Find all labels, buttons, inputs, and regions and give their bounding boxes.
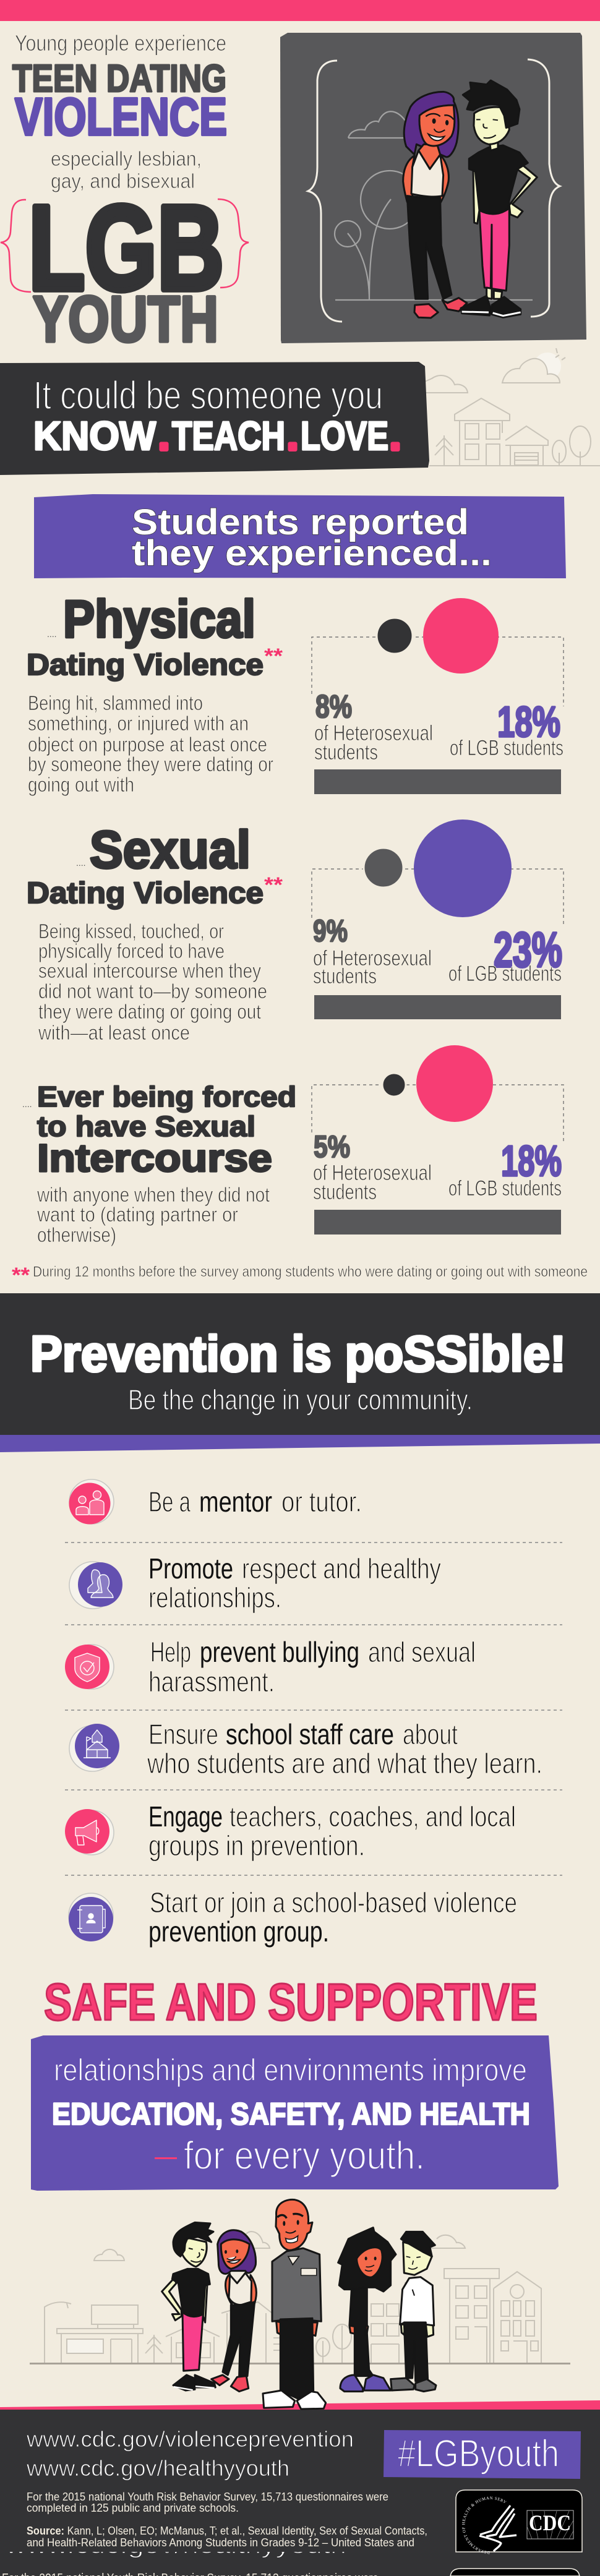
icon: megaphone [75,1820,99,1845]
seal ring text [465,2499,506,2551]
girl figure [403,92,467,318]
callout line three: for every youth. [184,2133,425,2178]
chart: forced comparison: 18% [501,1137,562,1185]
storefront [57,2305,143,2363]
item: engage: Engage [148,1800,223,1833]
LGB letters: LGB [28,181,224,315]
source notes [27,2490,427,2549]
clock tower building [494,2272,541,2363]
item: engage: teachers, coaches, and local [229,1800,516,1833]
footnote [12,1264,588,1287]
town line art [30,2232,570,2364]
asterisks: ** [264,873,283,897]
heading dots: .... [47,629,57,639]
dark band [0,1293,600,1435]
description: object on purpose at least once [28,733,267,756]
icon: school building [84,1730,111,1758]
panel: physical dating violence [27,590,564,796]
item: promote [69,1552,441,1614]
footnote asterisks: ** [12,1264,30,1287]
item: school staff: about [403,1718,458,1750]
description: with—at least once [38,1021,190,1044]
source notes: completed in 125 public and private schools. [27,2501,239,2514]
logo: HHS and CDC: DEPARTMENT OF HEALTH & HUMAN SERVICES · USA [461,2496,507,2554]
footer dark background [0,2410,600,2576]
chart: sexual comparison: of LGB students [448,962,562,986]
clipped line: www.cdc.gov/healthyyouth [5,2533,346,2558]
url: violence prevention: www.cdc.gov/violenceprevention [26,2426,354,2452]
figures [403,80,537,318]
description [28,691,273,796]
source notes: and Health-Related Behaviors Among Students in Grades 9-12 – United States and [27,2536,414,2549]
icon: shield check [75,1653,100,1682]
description: physically forced to have [38,939,225,962]
sun rays [555,348,565,360]
banner shape [0,362,429,475]
banner line one: It could be someone you [33,373,383,417]
item: promote: Promote [148,1552,233,1585]
description: going out with [28,773,134,796]
heading sexual: Sexual [90,821,251,879]
panel: forced sexual intercourse [22,1045,564,1246]
chart: forced comparison: of LGB students [448,1176,562,1200]
hashtag text: #LGByouth [398,2433,559,2475]
chart: physical comparison: students [314,740,378,764]
item: prevent bullying: and sexual [368,1636,476,1668]
heading dots: .... [22,1099,32,1109]
pine tree [145,2335,163,2363]
url: healthy youth: www.cdc.gov/healthyyouth [26,2455,289,2481]
heading line two: to have Sexual [37,1110,255,1142]
item: school staff [69,1718,542,1779]
icon: silhouettes [88,1570,113,1598]
item: mentor: mentor [199,1486,272,1518]
panel: students reported heading [34,494,566,578]
description [36,1183,270,1246]
item: prevent bullying: harassment. [148,1666,275,1698]
sun [534,353,561,380]
bald man [263,2199,326,2409]
heading physical: Physical [63,590,255,649]
heading: teen dating: TEEN DATING [12,58,226,100]
cloud: left [421,375,468,393]
heading: violence: VIOLENCE [15,88,227,147]
clipped repeated footer text [2,2552,377,2576]
item: mentor: Be a [148,1486,191,1518]
word: teach: TEACH [172,413,285,458]
item: school staff: Ensure [148,1718,218,1750]
CDC mark [527,2510,573,2539]
description: did not want to—by someone [38,980,267,1003]
left pink brace [1,200,31,292]
description: by someone they were dating or [28,753,273,776]
item: mentor: or tutor. [281,1486,362,1518]
item: start group [69,1886,517,1948]
background line art [335,111,533,300]
chart: sexual comparison: 9% [313,914,348,948]
description [38,920,267,1044]
survey note: For the 2015 national Youth Risk Behavior Survey, 15,713 questionnaires were [27,2490,388,2503]
especially lesbian line: especially lesbian, [51,147,202,170]
tag background [384,2430,581,2479]
right pink brace [218,199,249,288]
ground [30,2363,570,2364]
boy in white shirt [391,2232,436,2392]
prevention subheading: Be the change in your community. [128,1384,473,1416]
panel: sexual dating violence [27,819,564,1044]
boy figure [461,80,537,317]
chart: sexual comparison [312,819,564,1019]
chart: forced comparison [312,1045,564,1235]
girl with long black hair [338,2228,396,2392]
dot: . [390,413,401,458]
chart: physical comparison: 18% [497,698,560,746]
street scene behind banner [421,348,600,466]
item: school staff: school staff care [226,1718,394,1750]
girl with purple hair [212,2230,256,2392]
eagle mark [479,2505,516,2551]
panel: relationships callout [31,2035,559,2191]
callout line one: relationships and environments improve [54,2053,527,2087]
trees [435,435,580,465]
right white brace [528,59,560,317]
logo background [456,2490,582,2552]
footer links [26,2426,354,2481]
logo: HHS and CDC: CDC [529,2510,571,2535]
houses [166,2302,286,2363]
chart: physical comparison [312,598,564,794]
top pink bar [0,0,600,21]
item: engage [65,1800,516,1862]
item: promote: relationships. [148,1581,281,1614]
pink dash [155,2157,177,2159]
description: Being kissed, touched, or [38,920,224,943]
heading dating violence: Dating Violence [27,877,264,910]
heading line one: Students reported [132,502,469,542]
boy with pink pants [162,2222,215,2390]
chart: sexual comparison: of Heterosexual [313,946,432,970]
background trees [323,2326,342,2363]
store windows [67,2339,103,2353]
icon: two people [76,1491,104,1515]
description: Being hit, slammed into [28,691,203,714]
item: start group: prevention group. [148,1915,329,1948]
word: know: KNOW [33,413,156,458]
hashtag tag [384,2430,581,2479]
purple band [34,494,566,578]
purple slanted band [0,1435,600,1452]
chart: physical comparison: of Heterosexual [314,721,433,745]
item: prevent bullying [65,1636,476,1698]
chart: sexual comparison: students [313,964,377,988]
chart: forced comparison: 5% [314,1129,350,1164]
panel background [280,33,586,343]
source citation: Source: Kann, L; Olsen, EO; McManus, T; et al., Sexual Identity, Sex of Sexual Contacts, [27,2524,427,2537]
group of people illustration [162,2199,436,2409]
list: prevention actions [65,1479,562,1948]
lamp post [45,2302,71,2363]
description: with anyone when they did not [36,1183,270,1206]
heading dots: .... [76,858,86,868]
description: want to (dating partner or [36,1203,238,1226]
icon: address book [77,1906,105,1933]
ground line [429,465,600,466]
heading line two: they experienced... [132,533,492,573]
prevention heading: Prevention is poSSible! [30,1326,566,1382]
item: mentor [69,1479,362,1524]
apartment block [365,2269,499,2363]
chart: forced comparison: students [313,1180,377,1204]
callout line two: EDUCATION, SAFETY, AND HEALTH [52,2097,530,2131]
item: promote: respect and healthy [242,1552,441,1585]
chart: physical comparison: 8% [315,689,352,725]
youth word: YOUTH [33,283,218,356]
clouds [94,2232,465,2261]
item: start group: Start or join a school-based violence [150,1886,517,1919]
item: prevent bullying: Help [150,1636,191,1668]
title block [1,30,249,356]
panel: prevention header [0,1293,600,1452]
item: engage: groups in prevention. [148,1829,365,1862]
asterisks: ** [264,644,283,668]
dot: . [158,413,169,458]
purple box [31,2035,559,2191]
panel: couple illustration [280,33,586,343]
banner: it could be someone you [0,362,429,475]
description: otherwise) [37,1223,116,1246]
logo: repeated clipped logo [450,2569,580,2576]
pink slanted band [0,2400,600,2410]
item: prevent bullying: prevent bullying [200,1636,359,1668]
description: they were dating or going out [38,1000,261,1023]
intro line: Young people experience [15,30,226,56]
heading intercourse: Intercourse [37,1137,272,1180]
chart: sexual comparison: 23% [494,922,562,977]
description: sexual intercourse when they [38,959,261,982]
cloud: right [502,359,560,383]
gay and bisexual line: gay, and bisexual [51,169,195,192]
heading line one: Ever being forced [37,1080,296,1113]
description: something, or injured with an [28,712,249,735]
heading dating violence: Dating Violence [27,649,264,682]
word: love: LOVE [301,413,388,458]
houses [455,398,548,466]
left white brace [308,61,342,322]
dot: . [287,413,298,458]
chart: forced comparison: of Heterosexual [313,1161,432,1185]
